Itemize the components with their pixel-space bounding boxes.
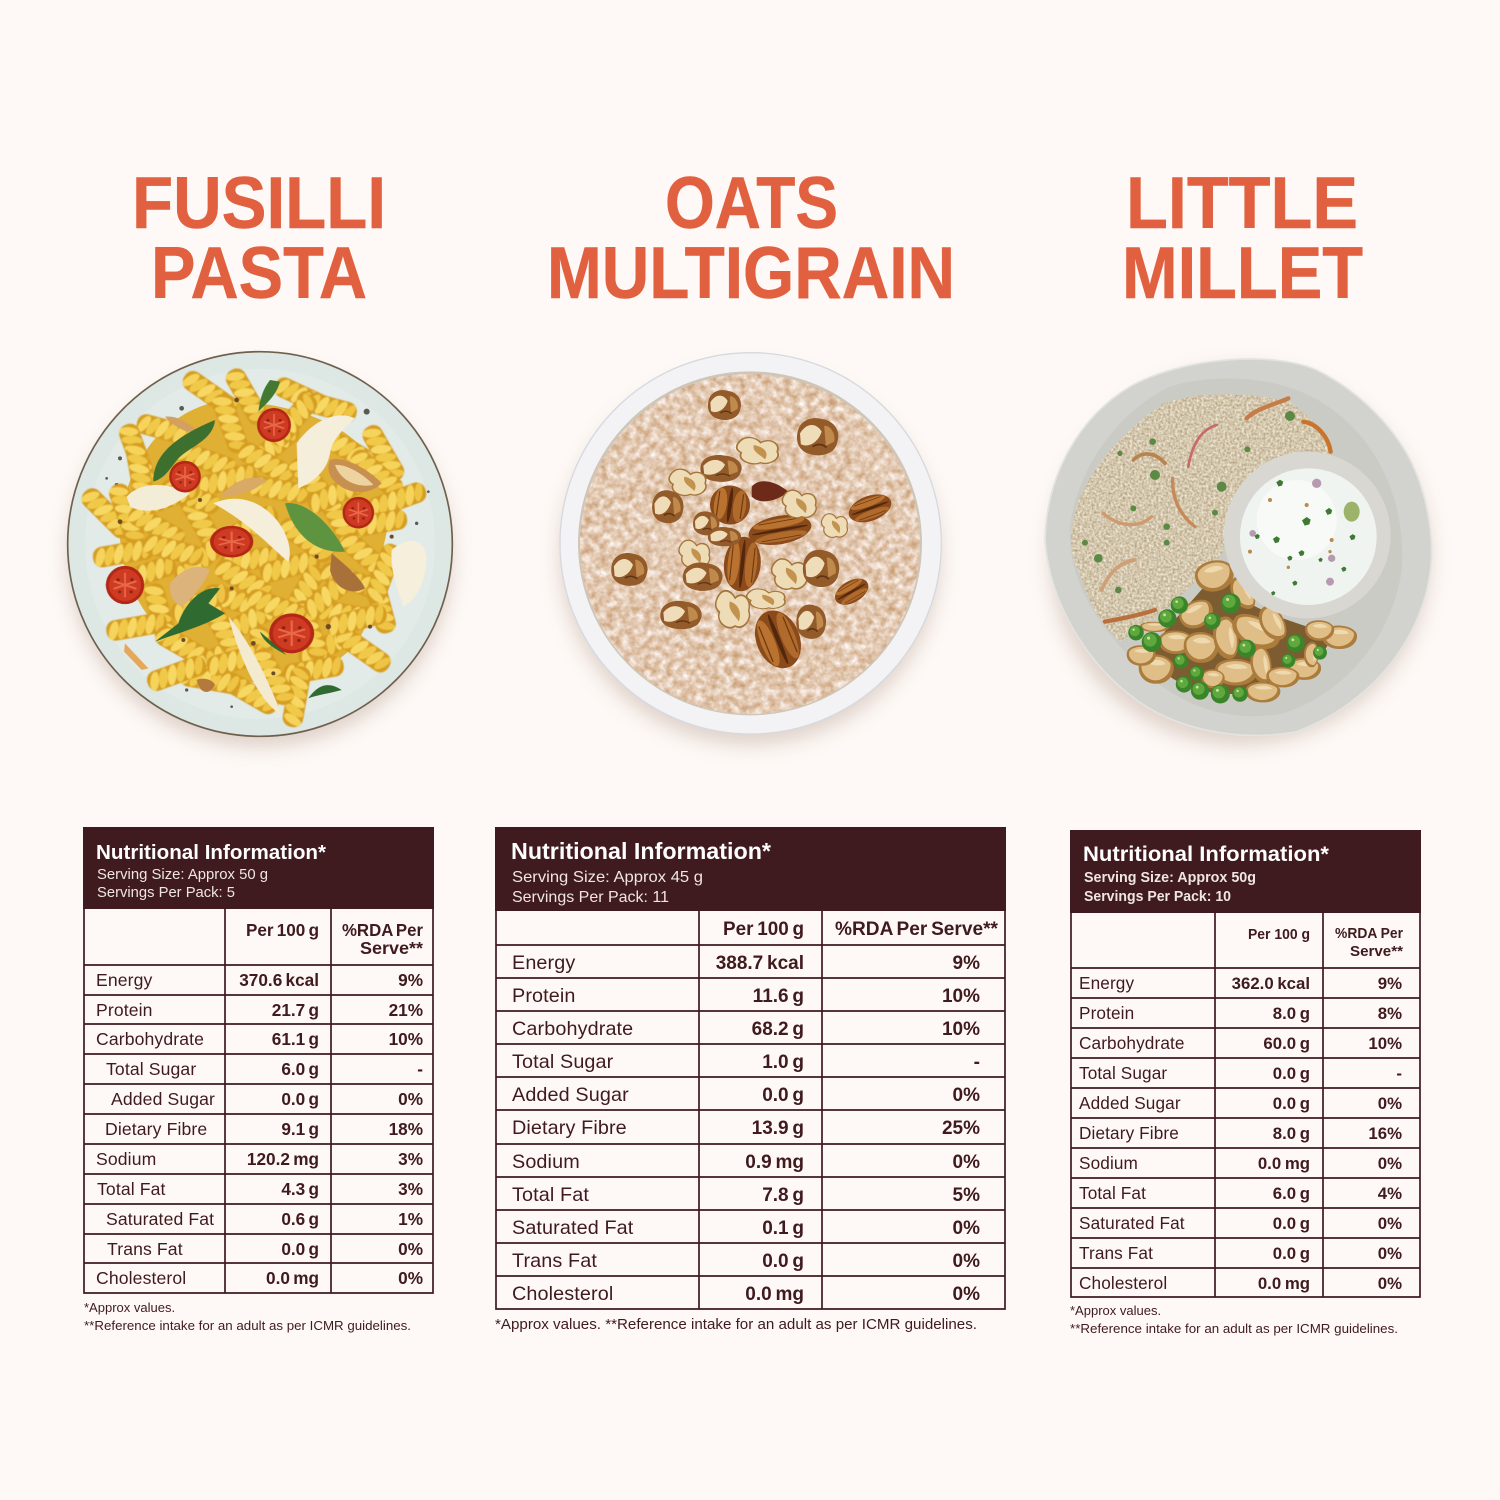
table header band bbox=[83, 827, 434, 909]
per 100 g values: 0.0 g bbox=[1273, 1214, 1310, 1233]
column headers: %RDA Per bbox=[1335, 925, 1403, 942]
RDA values: 0% bbox=[398, 1268, 423, 1288]
per 100 g values: 0.0 mg bbox=[1258, 1154, 1310, 1173]
RDA values: 0% bbox=[953, 1251, 980, 1272]
per 100 g values: 0.0 g bbox=[281, 1239, 319, 1259]
RDA values: 0% bbox=[1378, 1214, 1402, 1233]
per 100 g values: 8.0 g bbox=[1273, 1124, 1310, 1143]
per 100 g values: 61.1 g bbox=[272, 1029, 319, 1049]
footnote: *Approx values. bbox=[84, 1300, 175, 1315]
nutrient names: Saturated Fat bbox=[512, 1217, 634, 1239]
RDA values: 9% bbox=[1378, 974, 1402, 993]
per 100 g values: 0.0 g bbox=[281, 1089, 319, 1109]
RDA values: 0% bbox=[1378, 1274, 1402, 1293]
nutrient names: Carbohydrate bbox=[1079, 1033, 1185, 1053]
nutrient names: Cholesterol bbox=[512, 1283, 613, 1305]
nutrient names: Carbohydrate bbox=[96, 1029, 204, 1049]
per 100 g values: 0.9 mg bbox=[745, 1152, 804, 1173]
table header band: Nutritional Information* bbox=[96, 841, 326, 864]
per 100 g values: 0.0 g bbox=[1273, 1244, 1310, 1263]
RDA values: 9% bbox=[398, 970, 423, 990]
per 100 g values bbox=[1232, 974, 1310, 1293]
table header band: Nutritional Information* bbox=[511, 838, 771, 864]
food image: fusilli pasta plate bbox=[68, 352, 452, 747]
title: Little Millet bbox=[1122, 163, 1363, 314]
per 100 g values: 4.3 g bbox=[281, 1179, 319, 1199]
per 100 g values bbox=[239, 970, 319, 1288]
nutrient names: Dietary Fibre bbox=[512, 1117, 627, 1139]
table header band: Servings Per Pack: 11 bbox=[512, 889, 669, 906]
RDA values bbox=[942, 953, 980, 1305]
nutrient names: Added Sugar bbox=[512, 1084, 629, 1106]
per 100 g values: 388.7 kcal bbox=[716, 953, 804, 974]
RDA values: 18% bbox=[389, 1119, 423, 1139]
footnote: *Approx values. bbox=[1070, 1303, 1161, 1318]
title: Oats Multigrain: MULTIGRAIN bbox=[547, 233, 955, 314]
per 100 g values: 8.0 g bbox=[1273, 1004, 1310, 1023]
per 100 g values: 120.2 mg bbox=[247, 1149, 319, 1169]
per 100 g values: 1.0 g bbox=[762, 1052, 804, 1073]
column headers: Per 100 g bbox=[246, 920, 319, 940]
per 100 g values: 0.0 mg bbox=[745, 1284, 804, 1305]
nutrient names: Added Sugar bbox=[1079, 1093, 1181, 1113]
nutrient names: Total Sugar bbox=[512, 1051, 614, 1073]
footnote bbox=[84, 1300, 411, 1333]
RDA values: 3% bbox=[398, 1149, 423, 1169]
RDA values: 0% bbox=[953, 1284, 980, 1305]
nutrient names: Protein bbox=[512, 985, 576, 1007]
per 100 g values bbox=[716, 953, 804, 1305]
nutrient names: Dietary Fibre bbox=[105, 1119, 207, 1139]
nutrient names: Saturated Fat bbox=[1079, 1213, 1185, 1233]
nutrient names: Added Sugar bbox=[111, 1089, 215, 1109]
column headers: Per 100 g bbox=[723, 919, 804, 940]
nutrient names: Energy bbox=[96, 970, 153, 990]
nutrient names: Protein bbox=[96, 1000, 153, 1020]
nutrition table: Oats Multigrain bbox=[495, 827, 1006, 1333]
column headers: %RDA Per bbox=[342, 920, 423, 940]
per 100 g values: 9.1 g bbox=[281, 1119, 319, 1139]
per 100 g values: 370.6 kcal bbox=[239, 970, 319, 990]
RDA values: 0% bbox=[953, 1152, 980, 1173]
nutrient names: Dietary Fibre bbox=[1079, 1123, 1179, 1143]
nutrient names bbox=[1079, 973, 1185, 1293]
nutrient names: Protein bbox=[1079, 1003, 1134, 1023]
RDA values: 10% bbox=[1368, 1034, 1402, 1053]
nutrient names: Total Sugar bbox=[106, 1059, 196, 1079]
table header band: Serving Size: Approx 50g bbox=[1084, 870, 1256, 886]
RDA values: 16% bbox=[1368, 1124, 1402, 1143]
nutrient names: Sodium bbox=[512, 1151, 580, 1173]
nutrient names: Cholesterol bbox=[96, 1268, 186, 1288]
nutrient names: Total Fat bbox=[512, 1184, 589, 1206]
title: Little Millet: MILLET bbox=[1122, 233, 1363, 314]
RDA values: 3% bbox=[398, 1179, 423, 1199]
column headers: Per 100 g bbox=[1248, 926, 1310, 943]
nutrient names: Saturated Fat bbox=[106, 1209, 214, 1229]
per 100 g values: 0.0 g bbox=[762, 1251, 804, 1272]
nutrient names: Trans Fat bbox=[512, 1250, 597, 1272]
nutrient names bbox=[512, 952, 634, 1305]
RDA values bbox=[1368, 974, 1402, 1293]
nutrient names bbox=[96, 970, 215, 1288]
RDA values: 10% bbox=[942, 986, 980, 1007]
RDA values: 8% bbox=[1378, 1004, 1402, 1023]
per 100 g values: 11.6 g bbox=[753, 986, 804, 1007]
nutrition table: Fusilli Pasta bbox=[83, 827, 434, 1333]
footnote bbox=[1070, 1303, 1398, 1336]
nutrient names: Total Fat bbox=[97, 1179, 166, 1199]
RDA values: 0% bbox=[1378, 1094, 1402, 1113]
nutrient names: Trans Fat bbox=[1079, 1243, 1153, 1263]
RDA values: 5% bbox=[953, 1185, 980, 1206]
title: Fusilli Pasta bbox=[132, 163, 386, 314]
footnote: **Reference intake for an adult as per ICMR guidelines. bbox=[84, 1318, 411, 1333]
table header band: Nutritional Information* bbox=[1083, 842, 1330, 866]
table header band: Serving Size: Approx 45 g bbox=[512, 869, 703, 886]
per 100 g values: 0.0 g bbox=[1273, 1064, 1310, 1083]
table header band: Servings Per Pack: 10 bbox=[1084, 889, 1231, 905]
per 100 g values: 0.0 mg bbox=[1258, 1274, 1310, 1293]
footnote: **Reference intake for an adult as per ICMR guidelines. bbox=[1070, 1321, 1398, 1336]
RDA values: - bbox=[417, 1059, 423, 1079]
RDA values: 0% bbox=[953, 1085, 980, 1106]
per 100 g values: 6.0 g bbox=[1273, 1184, 1310, 1203]
nutrient names: Sodium bbox=[1079, 1153, 1138, 1173]
per 100 g values: 0.1 g bbox=[762, 1218, 804, 1239]
nutrient names: Energy bbox=[1079, 973, 1134, 993]
table header band: Servings Per Pack: 5 bbox=[97, 885, 235, 901]
RDA values: 0% bbox=[398, 1239, 423, 1259]
column headers bbox=[246, 920, 423, 958]
column headers: Serve** bbox=[1350, 943, 1403, 960]
table header band bbox=[495, 827, 1006, 911]
nutrient names: Total Sugar bbox=[1079, 1063, 1167, 1083]
per 100 g values: 0.0 mg bbox=[266, 1268, 319, 1288]
footnote: *Approx values. **Reference intake for an adult as per ICMR guidelines. bbox=[495, 1316, 977, 1333]
per 100 g values: 0.0 g bbox=[762, 1085, 804, 1106]
per 100 g values: 0.0 g bbox=[1273, 1094, 1310, 1113]
RDA values: 10% bbox=[942, 1019, 980, 1040]
RDA values: 0% bbox=[1378, 1154, 1402, 1173]
title: Oats Multigrain bbox=[547, 163, 955, 314]
table header band bbox=[1070, 830, 1421, 913]
per 100 g values: 7.8 g bbox=[762, 1185, 804, 1206]
per 100 g values: 0.6 g bbox=[281, 1209, 319, 1229]
title: Fusilli Pasta: FUSILLI bbox=[132, 163, 386, 244]
title: Little Millet: LITTLE bbox=[1126, 163, 1358, 244]
column headers bbox=[1248, 925, 1403, 960]
RDA values: 0% bbox=[1378, 1244, 1402, 1263]
column headers: %RDA Per Serve** bbox=[835, 919, 999, 940]
nutrition table: Little Millet bbox=[1070, 830, 1421, 1336]
RDA values: 4% bbox=[1378, 1184, 1402, 1203]
RDA values: 10% bbox=[389, 1029, 423, 1049]
RDA values: 0% bbox=[953, 1218, 980, 1239]
RDA values: - bbox=[1396, 1064, 1402, 1083]
RDA values: - bbox=[974, 1052, 980, 1073]
per 100 g values: 21.7 g bbox=[272, 1000, 319, 1020]
per 100 g values: 60.0 g bbox=[1263, 1034, 1310, 1053]
nutrient names: Carbohydrate bbox=[512, 1018, 633, 1040]
nutrient names: Total Fat bbox=[1079, 1183, 1146, 1203]
RDA values: 25% bbox=[942, 1118, 980, 1139]
RDA values: 21% bbox=[389, 1000, 423, 1020]
column headers: Serve** bbox=[360, 938, 423, 958]
per 100 g values: 68.2 g bbox=[752, 1019, 804, 1040]
RDA values: 0% bbox=[398, 1089, 423, 1109]
nutrient names: Trans Fat bbox=[107, 1239, 183, 1259]
per 100 g values: 362.0 kcal bbox=[1232, 974, 1310, 993]
food image: oats bowl with pecans bbox=[560, 353, 941, 745]
food image: little millet bowl with raita, peas and mushrooms bbox=[1045, 359, 1432, 745]
nutrient names: Sodium bbox=[96, 1149, 156, 1169]
per 100 g values: 6.0 g bbox=[281, 1059, 319, 1079]
per 100 g values: 13.9 g bbox=[752, 1118, 804, 1139]
title: Oats Multigrain: OATS bbox=[665, 163, 838, 244]
title: Fusilli Pasta: PASTA bbox=[151, 233, 367, 314]
RDA values: 9% bbox=[953, 953, 980, 974]
column headers bbox=[723, 919, 999, 940]
RDA values: 1% bbox=[398, 1209, 423, 1229]
RDA values bbox=[389, 970, 423, 1288]
nutrient names: Cholesterol bbox=[1079, 1273, 1167, 1293]
nutrient names: Energy bbox=[512, 952, 575, 974]
table header band: Serving Size: Approx 50 g bbox=[97, 867, 268, 883]
